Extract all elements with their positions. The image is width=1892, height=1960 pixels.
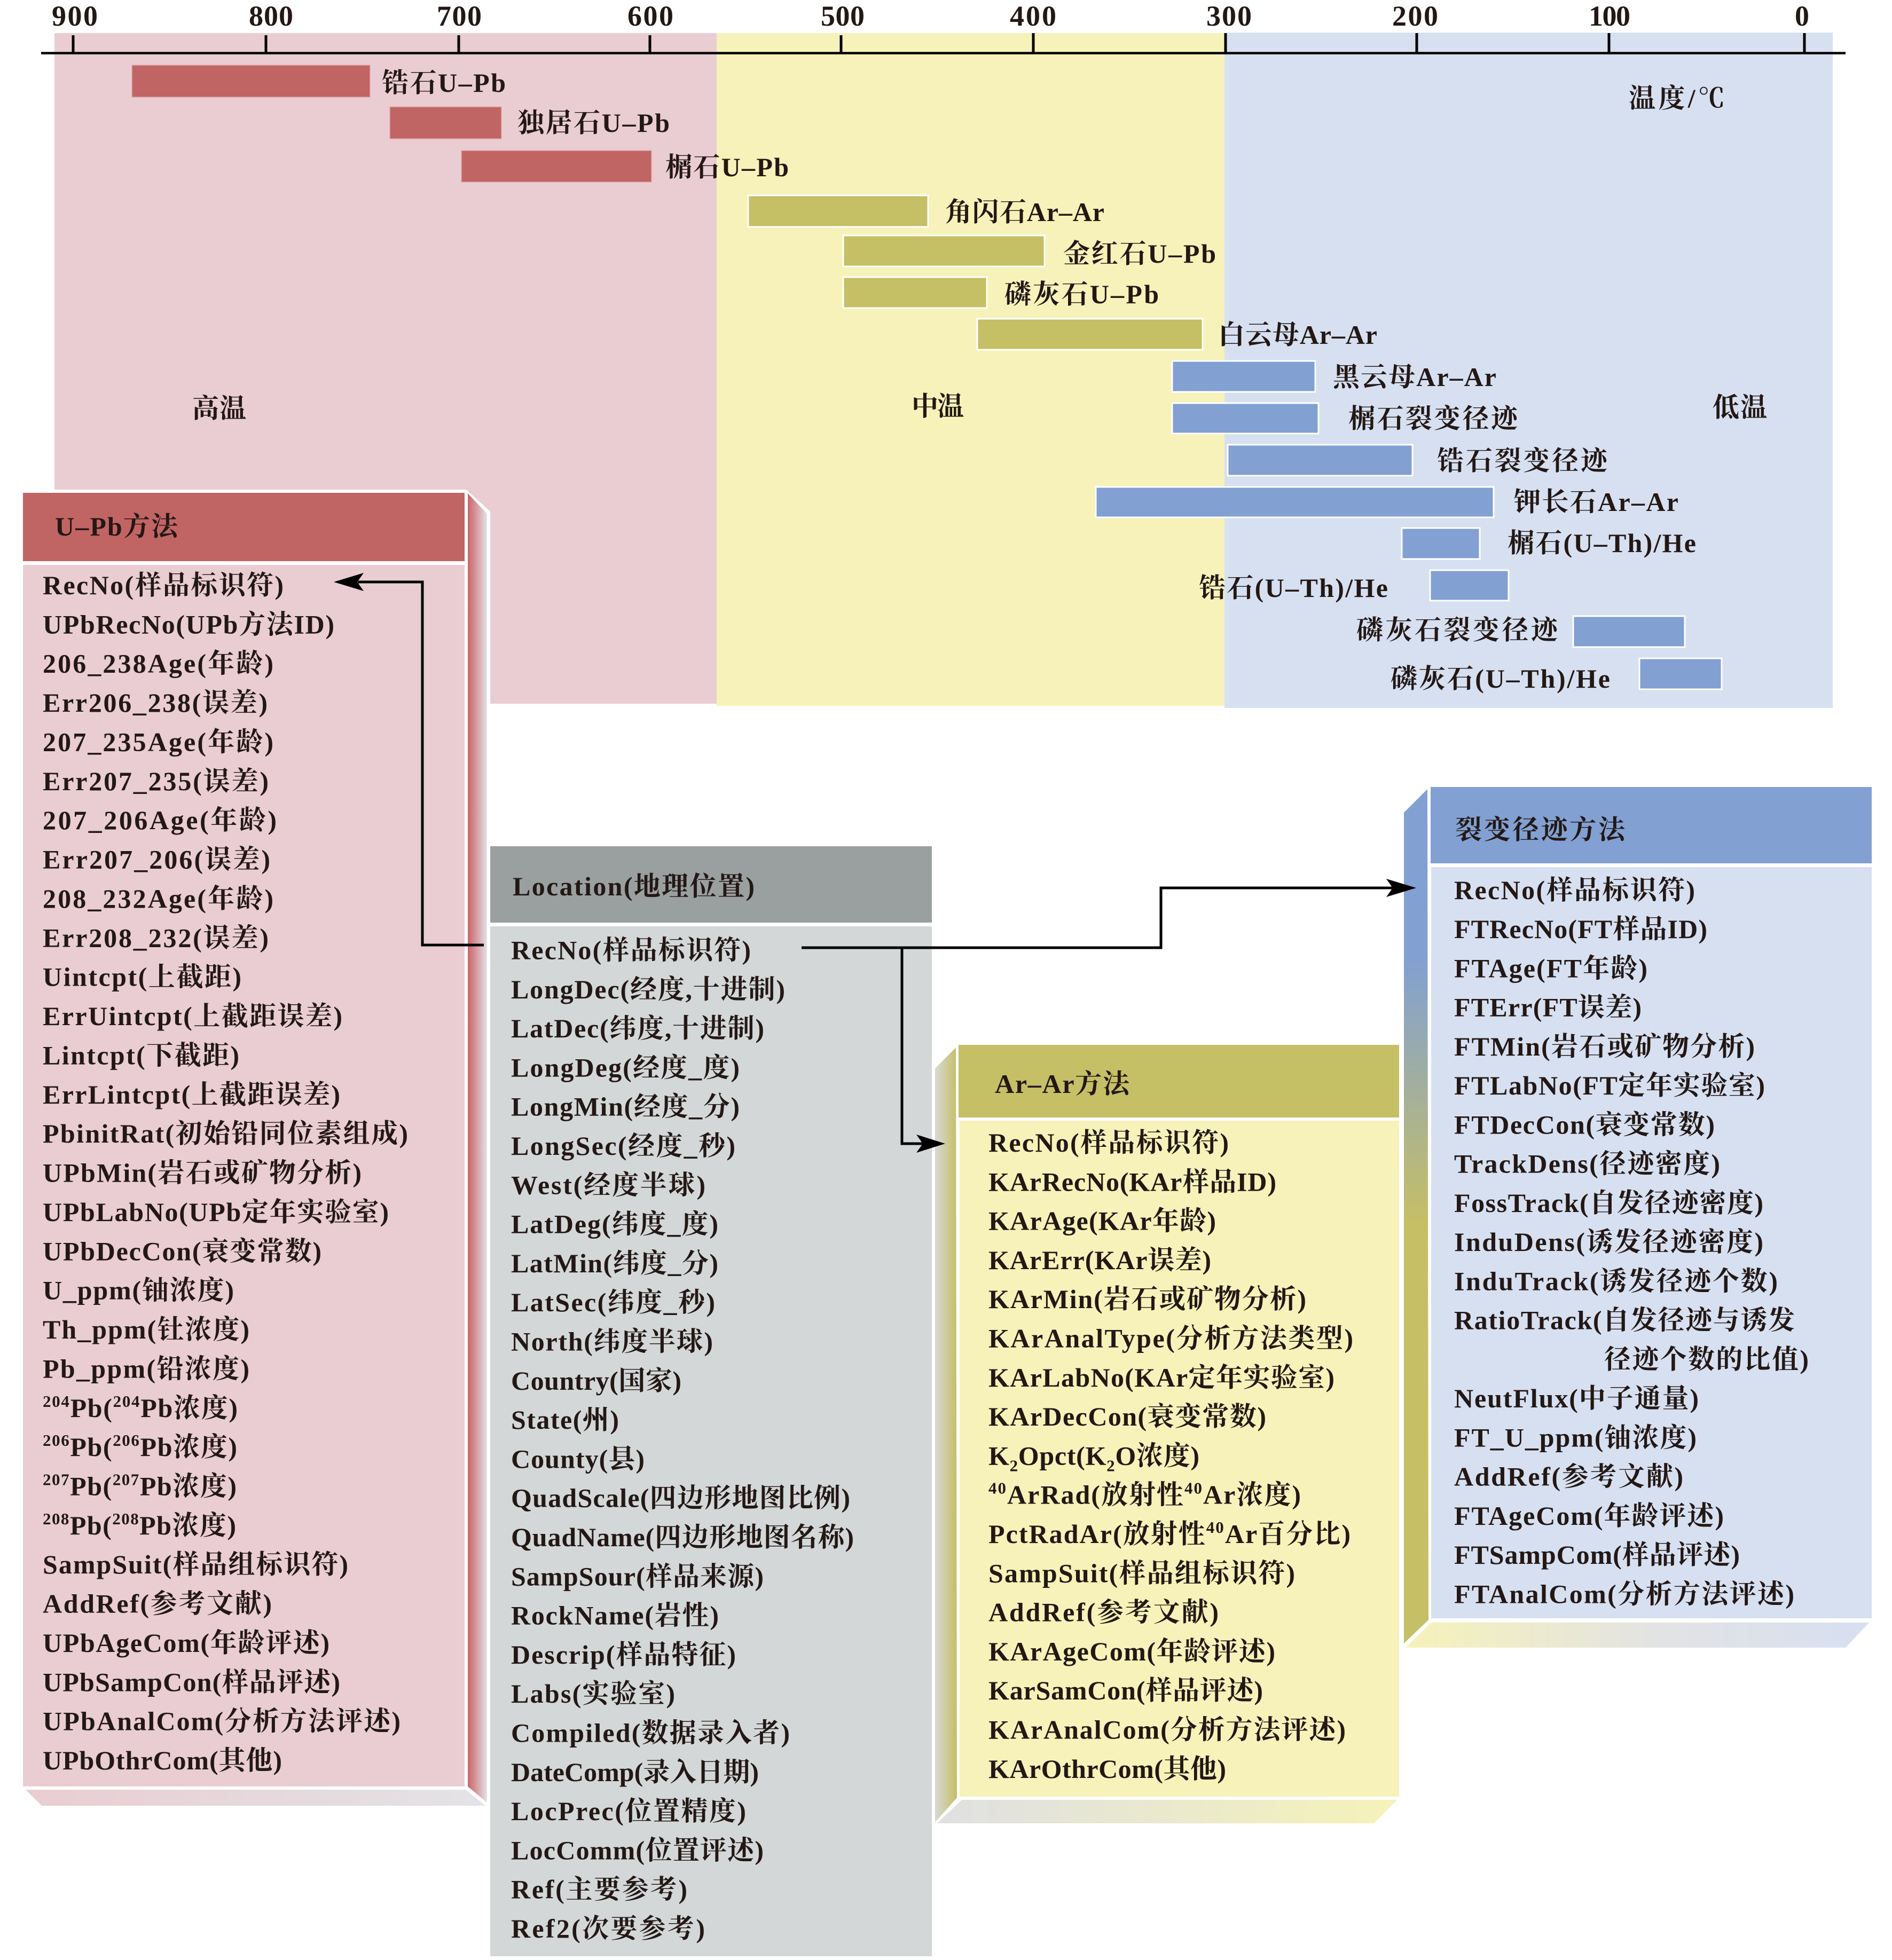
field list: 2 [1106, 1456, 1115, 1475]
field list: 2 [1010, 1456, 1018, 1475]
axis numbers: 100 [1589, 0, 1630, 32]
field list: Pb浓度) [140, 1471, 237, 1501]
range bar labels: 锆石(U–Th)/He [1199, 573, 1388, 603]
range bar labels: 独居石U–Pb [517, 108, 670, 138]
field list: 204 [113, 1392, 140, 1411]
field list: UPbMin(岩石或矿物分析) [43, 1158, 362, 1188]
field list: County(县) [511, 1444, 645, 1474]
field list: RatioTrack(自发径迹与诱发 [1454, 1305, 1795, 1335]
field list: Compiled(数据录入者) [511, 1718, 790, 1748]
field list: Uintcpt(上截距) [43, 962, 241, 992]
field list: AddRef(参考文献) [1454, 1462, 1683, 1492]
field list: Err208_232(误差) [43, 923, 269, 953]
field list: Opct(K [1018, 1441, 1106, 1470]
axis numbers: 800 [249, 0, 293, 32]
field list: QuadScale(四边形地图比例) [511, 1483, 850, 1513]
panel side face [468, 493, 487, 1802]
field list [988, 1128, 1353, 1784]
panel: Ar-Ar method [935, 1045, 1399, 1823]
field list: LongSec(经度_秒) [511, 1131, 735, 1161]
field list: 207_206Age(年龄) [43, 805, 277, 835]
field list: Descrip(样品特征) [511, 1640, 736, 1670]
range bar labels: 黑云母Ar–Ar [1333, 362, 1496, 392]
field list: 207_235Age(年龄) [43, 727, 273, 757]
field list: KArAgeCom(年龄评述) [988, 1636, 1275, 1666]
field list: LocPrec(位置精度) [511, 1796, 746, 1826]
axis numbers: 400 [1010, 0, 1056, 32]
field list: 40 [1206, 1518, 1224, 1537]
range bars: high temperature [132, 65, 651, 182]
field list: LatMin(纬度_分) [511, 1248, 718, 1278]
panel bottom face [937, 1800, 1397, 1823]
field list: 208 [112, 1509, 139, 1528]
field list: UPbLabNo(UPb定年实验室) [43, 1197, 389, 1227]
field list: NeutFlux(中子通量) [1454, 1383, 1699, 1413]
field list: TrackDens(径迹密度) [1454, 1149, 1720, 1179]
field list: KArAge(KAr年龄) [988, 1206, 1216, 1236]
range bar labels: 磷灰石裂变径迹 [1356, 615, 1559, 645]
field list: KarSamCon(样品评述) [988, 1675, 1263, 1705]
zone: high temperature [54, 33, 717, 704]
range bars: medium temperature [748, 195, 1203, 350]
panel body [23, 565, 465, 1786]
header title: 裂变径迹方法 [1455, 815, 1627, 845]
field list: 208 [43, 1509, 69, 1528]
field list: FTSampCom(样品评述) [1454, 1540, 1740, 1570]
range bar labels: 角闪石Ar–Ar [945, 197, 1104, 227]
field list: LongDec(经度,十进制) [511, 974, 785, 1004]
field list: RecNo(样品标识符) [511, 935, 751, 965]
field list: ErrUintcpt(上截距误差) [43, 1001, 342, 1031]
field list: 208_232Age(年龄) [43, 884, 273, 914]
range bar labels: 白云母Ar–Ar [1218, 320, 1377, 350]
field list: InduTrack(诱发径迹个数) [1454, 1266, 1778, 1296]
axis numbers: 700 [437, 0, 482, 32]
field list: KArErr(KAr误差) [988, 1245, 1211, 1275]
field list: North(纬度半球) [511, 1326, 713, 1356]
field list: 206 [113, 1431, 139, 1450]
field list: FT_U_ppm(铀浓度) [1454, 1422, 1697, 1452]
field list: Pb( [70, 1393, 112, 1423]
axis numbers: 900 [52, 0, 98, 32]
field list: Ref(主要参考) [511, 1875, 687, 1904]
field list: FTAnalCom(分析方法评述) [1454, 1579, 1794, 1609]
arrow: Location to U-Pb [334, 573, 484, 945]
field list: Lintcpt(下截距) [43, 1040, 239, 1070]
field list: ErrLintcpt(上截距误差) [43, 1080, 340, 1109]
field list: K [988, 1441, 1009, 1470]
field list: Err206_238(误差) [43, 688, 268, 718]
panel side face [1404, 789, 1428, 1643]
field list: FTAge(FT年龄) [1454, 954, 1647, 983]
field list: KArOthrCom(其他) [988, 1754, 1226, 1784]
field list: U_ppm(铀浓度) [43, 1276, 234, 1305]
range bar labels: 榍石裂变径迹 [1348, 404, 1519, 434]
field list: FTLabNo(FT定年实验室) [1454, 1070, 1765, 1100]
panel bottom face [26, 1790, 485, 1806]
field list: Ref2(次要参考) [511, 1914, 705, 1943]
range bars: low temperature [1096, 361, 1722, 689]
arrow: Location to Ar-Ar [902, 948, 945, 1153]
field list: KArDecCon(衰变常数) [988, 1402, 1266, 1431]
range bar labels: 锆石U–Pb [382, 68, 506, 98]
field list: 206_238Age(年龄) [43, 649, 273, 679]
field list: 207 [43, 1470, 69, 1489]
zone label: low: 低温 [1713, 392, 1767, 422]
panel header [490, 846, 932, 923]
field list: PbinitRat(初始铅同位素组成) [43, 1119, 408, 1148]
panel: fission track method [1404, 787, 1872, 1648]
panel header [959, 1045, 1399, 1117]
range bar labels: 钾长石Ar–Ar [1514, 487, 1678, 517]
field list [43, 570, 408, 1775]
field list: FTRecNo(FT样品ID) [1454, 914, 1707, 944]
field list: SampSuit(样品组标识符) [43, 1549, 348, 1579]
field list: O浓度) [1115, 1441, 1199, 1470]
field list: FTDecCon(衰变常数) [1454, 1109, 1715, 1139]
field list: UPbSampCon(样品评述) [43, 1667, 340, 1697]
field list: Err207_235(误差) [43, 766, 269, 796]
field list: KArLabNo(KAr定年实验室) [988, 1363, 1334, 1392]
header title: U–Pb方法 [55, 511, 180, 541]
field list: Pb( [70, 1432, 112, 1462]
field list [1454, 875, 1809, 1609]
field list: Pb浓度) [140, 1432, 237, 1462]
field list: AddRef(参考文献) [988, 1597, 1219, 1627]
field list: 40 [1184, 1479, 1202, 1498]
field list: 204 [43, 1392, 69, 1411]
field list: LatSec(纬度_秒) [511, 1287, 715, 1317]
field list: FTMin(岩石或矿物分析) [1454, 1032, 1755, 1061]
field list: Pb_ppm(铅浓度) [43, 1353, 249, 1383]
field list: FTAgeCom(年龄评述) [1454, 1501, 1724, 1531]
field list: RecNo(样品标识符) [1454, 875, 1695, 905]
panel header [23, 493, 465, 561]
field list: DateComp(录入日期) [511, 1757, 759, 1787]
field list: 207 [113, 1470, 139, 1489]
panel bottom face [1406, 1623, 1869, 1648]
range bar labels: 榍石(U–Th)/He [1508, 528, 1696, 558]
field list: Ar百分比) [1225, 1519, 1351, 1549]
field list: Pb浓度) [140, 1393, 238, 1423]
axis numbers: 500 [821, 0, 865, 32]
panel: U-Pb method [20, 490, 490, 1815]
field list: FossTrack(自发径迹密度) [1454, 1188, 1763, 1218]
field list: UPbAnalCom(分析方法评述) [43, 1706, 401, 1736]
panel: Location [490, 846, 932, 1956]
arrow: Location to fission track [802, 879, 1416, 948]
field list: UPbOthrCom(其他) [43, 1745, 282, 1775]
field list: State(州) [511, 1405, 619, 1435]
field list: FTErr(FT误差) [1454, 993, 1642, 1022]
zone label: medium: 中温 [912, 391, 964, 421]
field list: RecNo(样品标识符) [988, 1128, 1229, 1158]
field list: AddRef(参考文献) [43, 1589, 272, 1619]
axis numbers: 600 [627, 0, 673, 32]
field list: LongMin(经度_分) [511, 1092, 740, 1122]
axis title: 温度/℃ [1629, 83, 1725, 113]
axis numbers: 0 [1795, 0, 1809, 32]
field list: UPbAgeCom(年龄评述) [43, 1628, 329, 1658]
axis numbers: 300 [1206, 0, 1252, 32]
zone label: high: 高温 [192, 393, 246, 423]
field list: Pb( [70, 1510, 112, 1540]
zone: low temperature [1224, 33, 1833, 708]
field list: KArAnalCom(分析方法评述) [988, 1715, 1346, 1745]
field list: Country(国家) [511, 1366, 681, 1396]
range bar labels: 金红石U–Pb [1063, 239, 1216, 269]
field list: RecNo(样品标识符) [43, 570, 284, 600]
panel side face [935, 1048, 957, 1822]
field list: KArRecNo(KAr样品ID) [988, 1167, 1276, 1197]
field list: ArRad(放射性 [1007, 1480, 1183, 1510]
header title: Ar–Ar方法 [995, 1069, 1132, 1099]
axis numbers: 200 [1392, 0, 1438, 32]
panel header [1431, 787, 1872, 863]
field list: PctRadAr(放射性 [988, 1519, 1205, 1549]
field list: RockName(岩性) [511, 1601, 719, 1631]
header title: Location(地理位置) [513, 871, 755, 901]
field list: KArMin(岩石或矿物分析) [988, 1284, 1306, 1314]
field list: Labs(实验室) [511, 1679, 675, 1709]
axis numbers [52, 0, 1809, 32]
temperature zones chart [41, 0, 1846, 708]
field list: QuadName(四边形地图名称) [511, 1522, 854, 1552]
field list: LongDeg(经度_度) [511, 1052, 740, 1082]
panel body [490, 926, 932, 1956]
panel body [960, 1121, 1399, 1797]
field list: InduDens(诱发径迹密度) [1454, 1227, 1763, 1257]
field list: West(经度半球) [511, 1170, 705, 1200]
panel body [1431, 867, 1872, 1618]
field list: LatDeg(纬度_度) [511, 1209, 718, 1239]
field list: UPbDecCon(衰变常数) [43, 1236, 321, 1266]
temperature axis [41, 33, 1846, 53]
field list: SampSour(样品来源) [511, 1561, 764, 1591]
field list: Err207_206(误差) [43, 845, 270, 875]
field list: Ar浓度) [1203, 1480, 1301, 1510]
field list: UPbRecNo(UPb方法ID) [43, 609, 334, 639]
field list: Th_ppm(钍浓度) [43, 1314, 249, 1344]
range bar labels [382, 68, 1696, 694]
range bar labels: 磷灰石U–Pb [1004, 279, 1159, 309]
range bar labels: 锆石裂变径迹 [1437, 446, 1609, 476]
field list: Pb( [70, 1471, 112, 1501]
field list: 径迹个数的比值) [1604, 1344, 1809, 1374]
field list: 40 [988, 1479, 1006, 1498]
field list: LatDec(纬度,十进制) [511, 1013, 764, 1043]
field list: KArAnalType(分析方法类型) [988, 1323, 1353, 1353]
field list: Pb浓度) [139, 1510, 236, 1540]
field list: SampSuit(样品组标识符) [988, 1558, 1295, 1588]
field list: LocComm(位置评述) [511, 1835, 764, 1865]
range bar labels: 磷灰石(U–Th)/He [1391, 664, 1610, 694]
range bar labels: 榍石U–Pb [665, 152, 789, 182]
field list: 206 [43, 1431, 69, 1450]
field list [511, 935, 854, 1943]
zone: medium temperature [717, 33, 1224, 706]
